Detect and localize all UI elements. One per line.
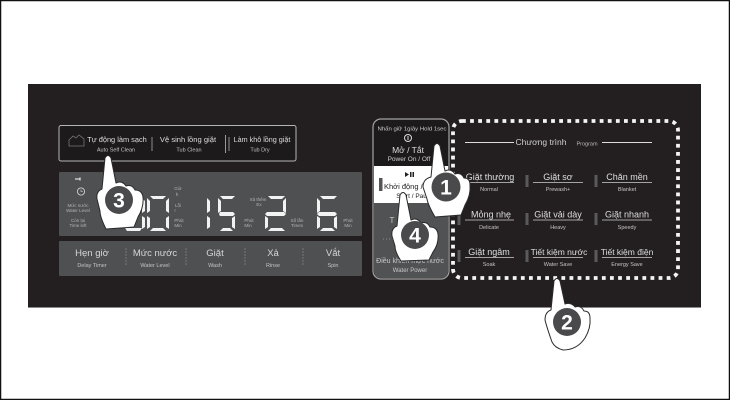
program: heavy: Heavy [550, 225, 566, 231]
label: water power [376, 256, 444, 274]
hand pointer 3 [97, 156, 143, 229]
heading: program [465, 137, 652, 148]
program: energy save [601, 247, 654, 268]
label: start pause: Start / Pause [396, 193, 434, 200]
display labels: Lỗi [175, 202, 181, 208]
icon: key lock [75, 178, 80, 180]
heading: program: Chương trình [516, 137, 567, 147]
display labels: Min [344, 223, 352, 228]
display labels: Phút [174, 218, 184, 223]
display labels: Times [291, 223, 304, 228]
display labels: Mức nước [68, 203, 89, 208]
panel: program dotted outline [453, 121, 678, 278]
program: water save [531, 247, 588, 268]
icon: timer [77, 188, 85, 195]
button: wash: Giặt [206, 248, 224, 259]
program: speedy [605, 210, 649, 231]
hand pointer 1: 1 [440, 176, 452, 200]
indicator [379, 178, 382, 191]
program: blanket [606, 172, 648, 193]
function: tub dry [234, 135, 290, 154]
button: water level: Mức nước [133, 248, 177, 259]
display labels: h [176, 192, 179, 197]
function: auto self clean: Auto Self Clean [97, 148, 135, 154]
label: start pause [384, 182, 459, 200]
program buttons [459, 172, 654, 268]
program: prewash [543, 172, 573, 193]
display labels: ! [174, 208, 176, 213]
program: water save: Water Save [544, 262, 572, 268]
display labels: Min [174, 223, 182, 228]
button: spin: Spin [327, 263, 339, 269]
panel: power and start [373, 119, 459, 279]
program: prewash: Giặt sơ [543, 172, 573, 182]
program: blanket: Chăn mền [606, 172, 648, 182]
button: delay timer: Delay Timer [77, 263, 107, 269]
button: spin: Vắt [326, 248, 340, 259]
hand pointer 4: 4 [409, 224, 421, 248]
program: water save: Tiết kiệm nước [531, 247, 588, 257]
program: heavy [534, 210, 582, 231]
button: water level [133, 248, 177, 269]
panel: control board [28, 84, 701, 308]
text: hold for one second: Nhấn giữ 1giây Hold 1sec [378, 126, 447, 132]
function: auto self clean: Tự động làm sạch [87, 135, 147, 144]
label: power on off [388, 145, 431, 163]
program: normal: Giặt thường [466, 172, 514, 182]
seven-segment digit 6 [317, 196, 337, 231]
hand pointer 2 [545, 278, 590, 350]
display labels [66, 186, 353, 228]
display labels: Giờ [174, 186, 182, 191]
program: heavy: Giặt vải dày [534, 210, 582, 220]
button: rinse: Rinse [266, 263, 280, 269]
program: soak: Giặt ngâm [468, 247, 510, 257]
display labels: Phút [244, 218, 254, 223]
button: spin [326, 248, 340, 269]
label: water power: Điều khiển mực nước [376, 256, 444, 265]
display labels: Phút [343, 218, 353, 223]
program: normal: Normal [480, 187, 498, 193]
icon: auto clean [69, 135, 84, 146]
seven-segment digit 2 [265, 196, 286, 231]
label: power on off: Mở / Tắt [392, 145, 425, 155]
icon: power [404, 134, 412, 142]
panel: tub functions [59, 126, 296, 161]
panel: power and start: T [390, 216, 395, 225]
program: delicate: Mỏng nhẹ [471, 210, 511, 220]
program: normal [466, 172, 514, 193]
button: rinse [266, 248, 280, 269]
label: water power: Water Power [393, 268, 427, 274]
button: water level: Water Level [140, 263, 170, 269]
section: water power [374, 203, 448, 278]
hand pointer 3: 3 [113, 190, 125, 212]
program: prewash: Prewash+ [546, 187, 570, 193]
program: delicate: Delicate [479, 225, 499, 231]
function: tub clean [160, 135, 217, 154]
program: delicate [471, 210, 511, 231]
label: start pause: Khởi động / Tạm dừng [384, 182, 459, 191]
function: tub clean: Tub Clean [176, 148, 202, 154]
program: blanket: Blanket [618, 187, 637, 193]
display labels: Water Level [66, 208, 90, 213]
hand pointer 4 [392, 192, 438, 261]
hand pointer 1 [423, 144, 470, 217]
seven-segment digit 1 [207, 198, 210, 229]
program: speedy: Giặt nhanh [605, 210, 649, 220]
program: energy save: Energy Save [611, 262, 643, 268]
display labels: Time left [69, 223, 87, 228]
hand pointer 2: 2 [561, 312, 573, 334]
function: auto self clean [87, 135, 147, 154]
function: tub dry: Làm khô lồng giặt [234, 135, 290, 144]
panel: digital display [59, 172, 362, 236]
seven-segment digit 0 [125, 198, 145, 231]
icon: play pause [405, 172, 414, 177]
display labels: Min [244, 223, 252, 228]
button: wash [206, 248, 224, 269]
program: soak [468, 247, 510, 268]
function: tub clean: Vệ sinh lồng giặt [160, 135, 217, 144]
program: speedy: Speedy [618, 225, 637, 231]
button: rinse: Xả [267, 248, 280, 259]
button: delay timer: Hẹn giờ [75, 248, 109, 259]
label: power on off: Power On / Off [388, 156, 431, 163]
seven-segment digit 5 [218, 196, 235, 231]
heading: program: Program [576, 142, 598, 148]
display labels: Số lần [291, 218, 304, 223]
button: delay timer [75, 248, 109, 269]
panel: option buttons [59, 241, 362, 276]
display labels: Ex [256, 202, 262, 207]
program: energy save: Tiết kiệm điện [601, 247, 654, 257]
function: tub dry: Tub Dry [250, 148, 270, 154]
section: start pause [374, 166, 448, 203]
display labels: Xả thêm [250, 197, 267, 202]
display labels: Còn lại [71, 218, 85, 223]
seven-segment digit 0 second [147, 196, 169, 231]
program: soak: Soak [483, 262, 496, 268]
button: wash: Wash [208, 263, 222, 269]
